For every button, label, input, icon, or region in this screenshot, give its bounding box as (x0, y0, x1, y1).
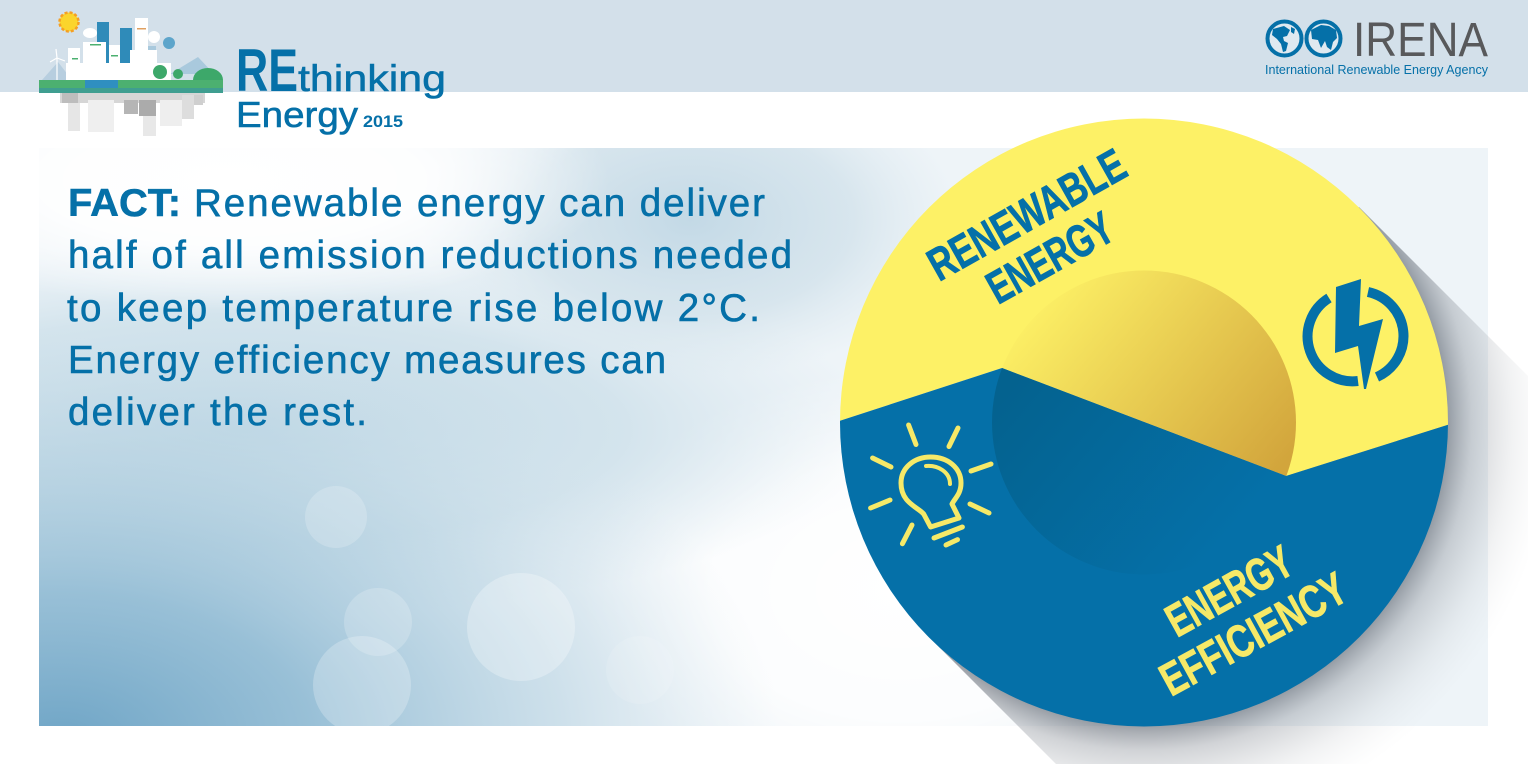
wordmark: IRENA (1353, 14, 1488, 67)
mountains (42, 57, 214, 80)
bokeh circles (305, 486, 575, 726)
icon: globe infinity (1268, 22, 1340, 56)
label: energy efficiency: ENERGY (1157, 535, 1302, 647)
reflected grey city (60, 93, 205, 136)
fact line 3: to keep temperature rise below 2°C. (67, 287, 760, 330)
publication title: Energy (236, 94, 358, 135)
yellow half: renewable energy (840, 118, 1448, 476)
label: renewable energy: RENEWABLE (918, 138, 1135, 291)
wind turbine (50, 49, 65, 80)
donut diagram (840, 118, 1448, 726)
publication title: thinking (298, 58, 446, 99)
fact line 2: half of all emission reductions needed (68, 234, 792, 277)
blue towers (97, 22, 132, 66)
fact text (67, 182, 792, 434)
label: renewable energy: ENERGY (977, 201, 1122, 314)
icon: lightning power (1308, 279, 1403, 389)
background panel (39, 148, 1488, 734)
fact line 5: deliver the rest. (68, 391, 367, 434)
IRENA logo (1265, 14, 1489, 77)
city illustration (39, 12, 223, 136)
icon: sun (60, 12, 78, 32)
header band (0, 0, 1528, 92)
label: energy efficiency: EFFICIENCY (1151, 562, 1356, 706)
fact line 1: FACT: (68, 182, 181, 225)
publication title (236, 37, 446, 135)
white buildings (66, 18, 171, 80)
long shadow of the circle (929, 207, 1528, 764)
publication title: 2015 (363, 112, 403, 131)
fact line 4: Energy efficiency measures can (68, 339, 666, 382)
blue half: energy efficiency (840, 368, 1448, 726)
tagline: International Renewable Energy Agency (1265, 63, 1489, 77)
fact text: Renewable energy can deliver (194, 182, 765, 225)
light tower behind (148, 46, 156, 66)
trees (153, 65, 223, 80)
clouds (83, 28, 175, 49)
label: renewable energy (918, 138, 1135, 314)
ground strip (39, 80, 223, 93)
icon: light bulb (871, 425, 991, 545)
building windows (72, 28, 146, 60)
publication title: RE (236, 37, 298, 104)
